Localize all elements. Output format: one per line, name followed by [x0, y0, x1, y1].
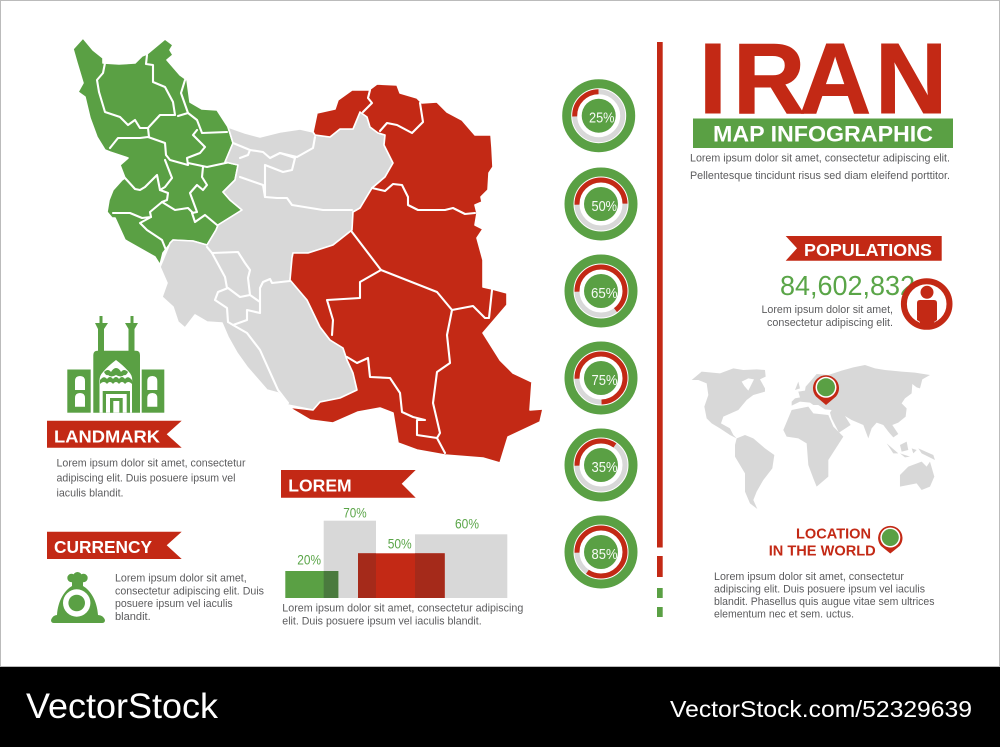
text block: landmark description: adipiscing elit. Duis posuere ipsum vel — [56, 473, 236, 485]
map region: green northwest provinces — [73, 38, 242, 265]
continent: africa — [783, 407, 843, 487]
icon: location pin on world map — [813, 375, 839, 405]
icon: location pin small — [878, 526, 902, 554]
icon: mosque landmark — [67, 316, 164, 413]
donut chart: 65% — [569, 259, 633, 323]
text block: location description: blandit. Phasellus quis augue vitae sem ultrices — [714, 596, 935, 608]
subtitle banner: MAP INFOGRAPHIC — [713, 122, 933, 147]
text block: currency description: blandit. — [115, 611, 151, 623]
ribbon: currency heading — [47, 532, 182, 559]
text block: population description: consectetur adipiscing elit. — [767, 317, 893, 329]
footer bar: VectorStock.com/52329639 — [670, 696, 972, 722]
donut chart: 35%: 35% — [592, 459, 618, 476]
text block: location description: elementum nec et sem. uctus. — [714, 609, 854, 621]
hudson bay cutout — [742, 378, 754, 391]
text block: location description: Lorem ipsum dolor sit amet, consectetur — [714, 571, 904, 583]
ribbon: lorem heading — [281, 470, 416, 498]
heading: location in the world — [769, 525, 876, 560]
bar chart: 60% — [455, 516, 479, 531]
ribbon: populations heading — [786, 236, 942, 261]
text block: currency description: posuere ipsum vel iaculis — [115, 598, 233, 610]
bar chart: 20% — [297, 552, 321, 567]
text block: currency description: Lorem ipsum dolor sit amet, — [115, 573, 247, 585]
title: IRAN — [699, 23, 947, 135]
donut chart: 75%: 75% — [592, 372, 618, 389]
donut chart: 85% — [569, 520, 633, 584]
donut chart: 25%: 25% — [589, 110, 614, 127]
donut chart: 50% — [569, 172, 633, 236]
text block: landmark description: Lorem ipsum dolor sit amet, consectetur — [56, 458, 246, 470]
text block: chart description — [282, 603, 523, 627]
footer bar: VectorStock — [26, 687, 219, 726]
text block: location description: adipiscing elit. Duis posuere ipsum vel iaculis — [714, 584, 925, 596]
text block: intro — [690, 153, 950, 182]
continent: north america — [692, 368, 766, 438]
ribbon: currency heading: CURRENCY — [54, 537, 152, 557]
text block: intro: Lorem ipsum dolor sit amet, consectetur adipiscing elit. — [690, 153, 950, 165]
text block: chart description: elit. Duis posuere ipsum vel iaculis blandit. — [282, 615, 482, 627]
text block: landmark description: iaculis blandit. — [56, 488, 124, 500]
world map — [692, 365, 935, 509]
map of Iran — [73, 38, 543, 463]
text block: landmark description — [56, 458, 246, 500]
continent: australia — [900, 462, 934, 490]
donut chart: 35% — [569, 433, 633, 497]
bar chart: 70% — [343, 505, 367, 520]
ribbon: populations heading: POPULATIONS — [804, 240, 932, 260]
continent: south america — [735, 435, 774, 509]
map region: red southeast provinces — [288, 84, 543, 463]
text block: population description — [762, 304, 893, 329]
continent: eurasia — [792, 365, 930, 438]
donut chart: 65%: 65% — [591, 285, 618, 302]
donut chart: 85%: 85% — [592, 546, 618, 563]
donut chart: 50%: 50% — [592, 198, 617, 215]
map region: grey central provinces — [160, 112, 393, 410]
ribbon: lorem heading: LOREM — [288, 476, 352, 496]
subtitle banner — [693, 118, 953, 148]
text block: population description: Lorem ipsum dolor sit amet, — [762, 304, 893, 316]
ribbon: landmark heading — [47, 421, 182, 448]
heading: location in the world: IN THE WORLD — [769, 543, 876, 560]
text block: chart description: Lorem ipsum dolor sit amet, consectetur adipiscing — [282, 603, 523, 615]
ribbon: landmark heading: LANDMARK — [54, 426, 160, 446]
footer bar — [0, 667, 1000, 747]
bar chart: 50% — [388, 536, 412, 551]
text block: intro: Pellentesque tincidunt risus sed diam eleifend porttitor. — [690, 170, 950, 182]
islands: scandinavia and indonesia — [795, 382, 935, 460]
donut chart: 25% — [567, 84, 631, 148]
bar chart — [285, 505, 507, 598]
icon: person in circle — [904, 281, 950, 327]
population number: 84,602,832 — [780, 270, 915, 301]
text block: currency description — [115, 573, 264, 623]
text block: currency description: consectetur adipiscing elit. Duis — [115, 586, 264, 598]
vertical divider with dashes — [657, 42, 663, 617]
icon: money bag — [51, 572, 105, 623]
text block: location description — [714, 571, 935, 621]
donut chart: 75% — [569, 346, 633, 410]
heading: location in the world: LOCATION — [796, 525, 871, 542]
